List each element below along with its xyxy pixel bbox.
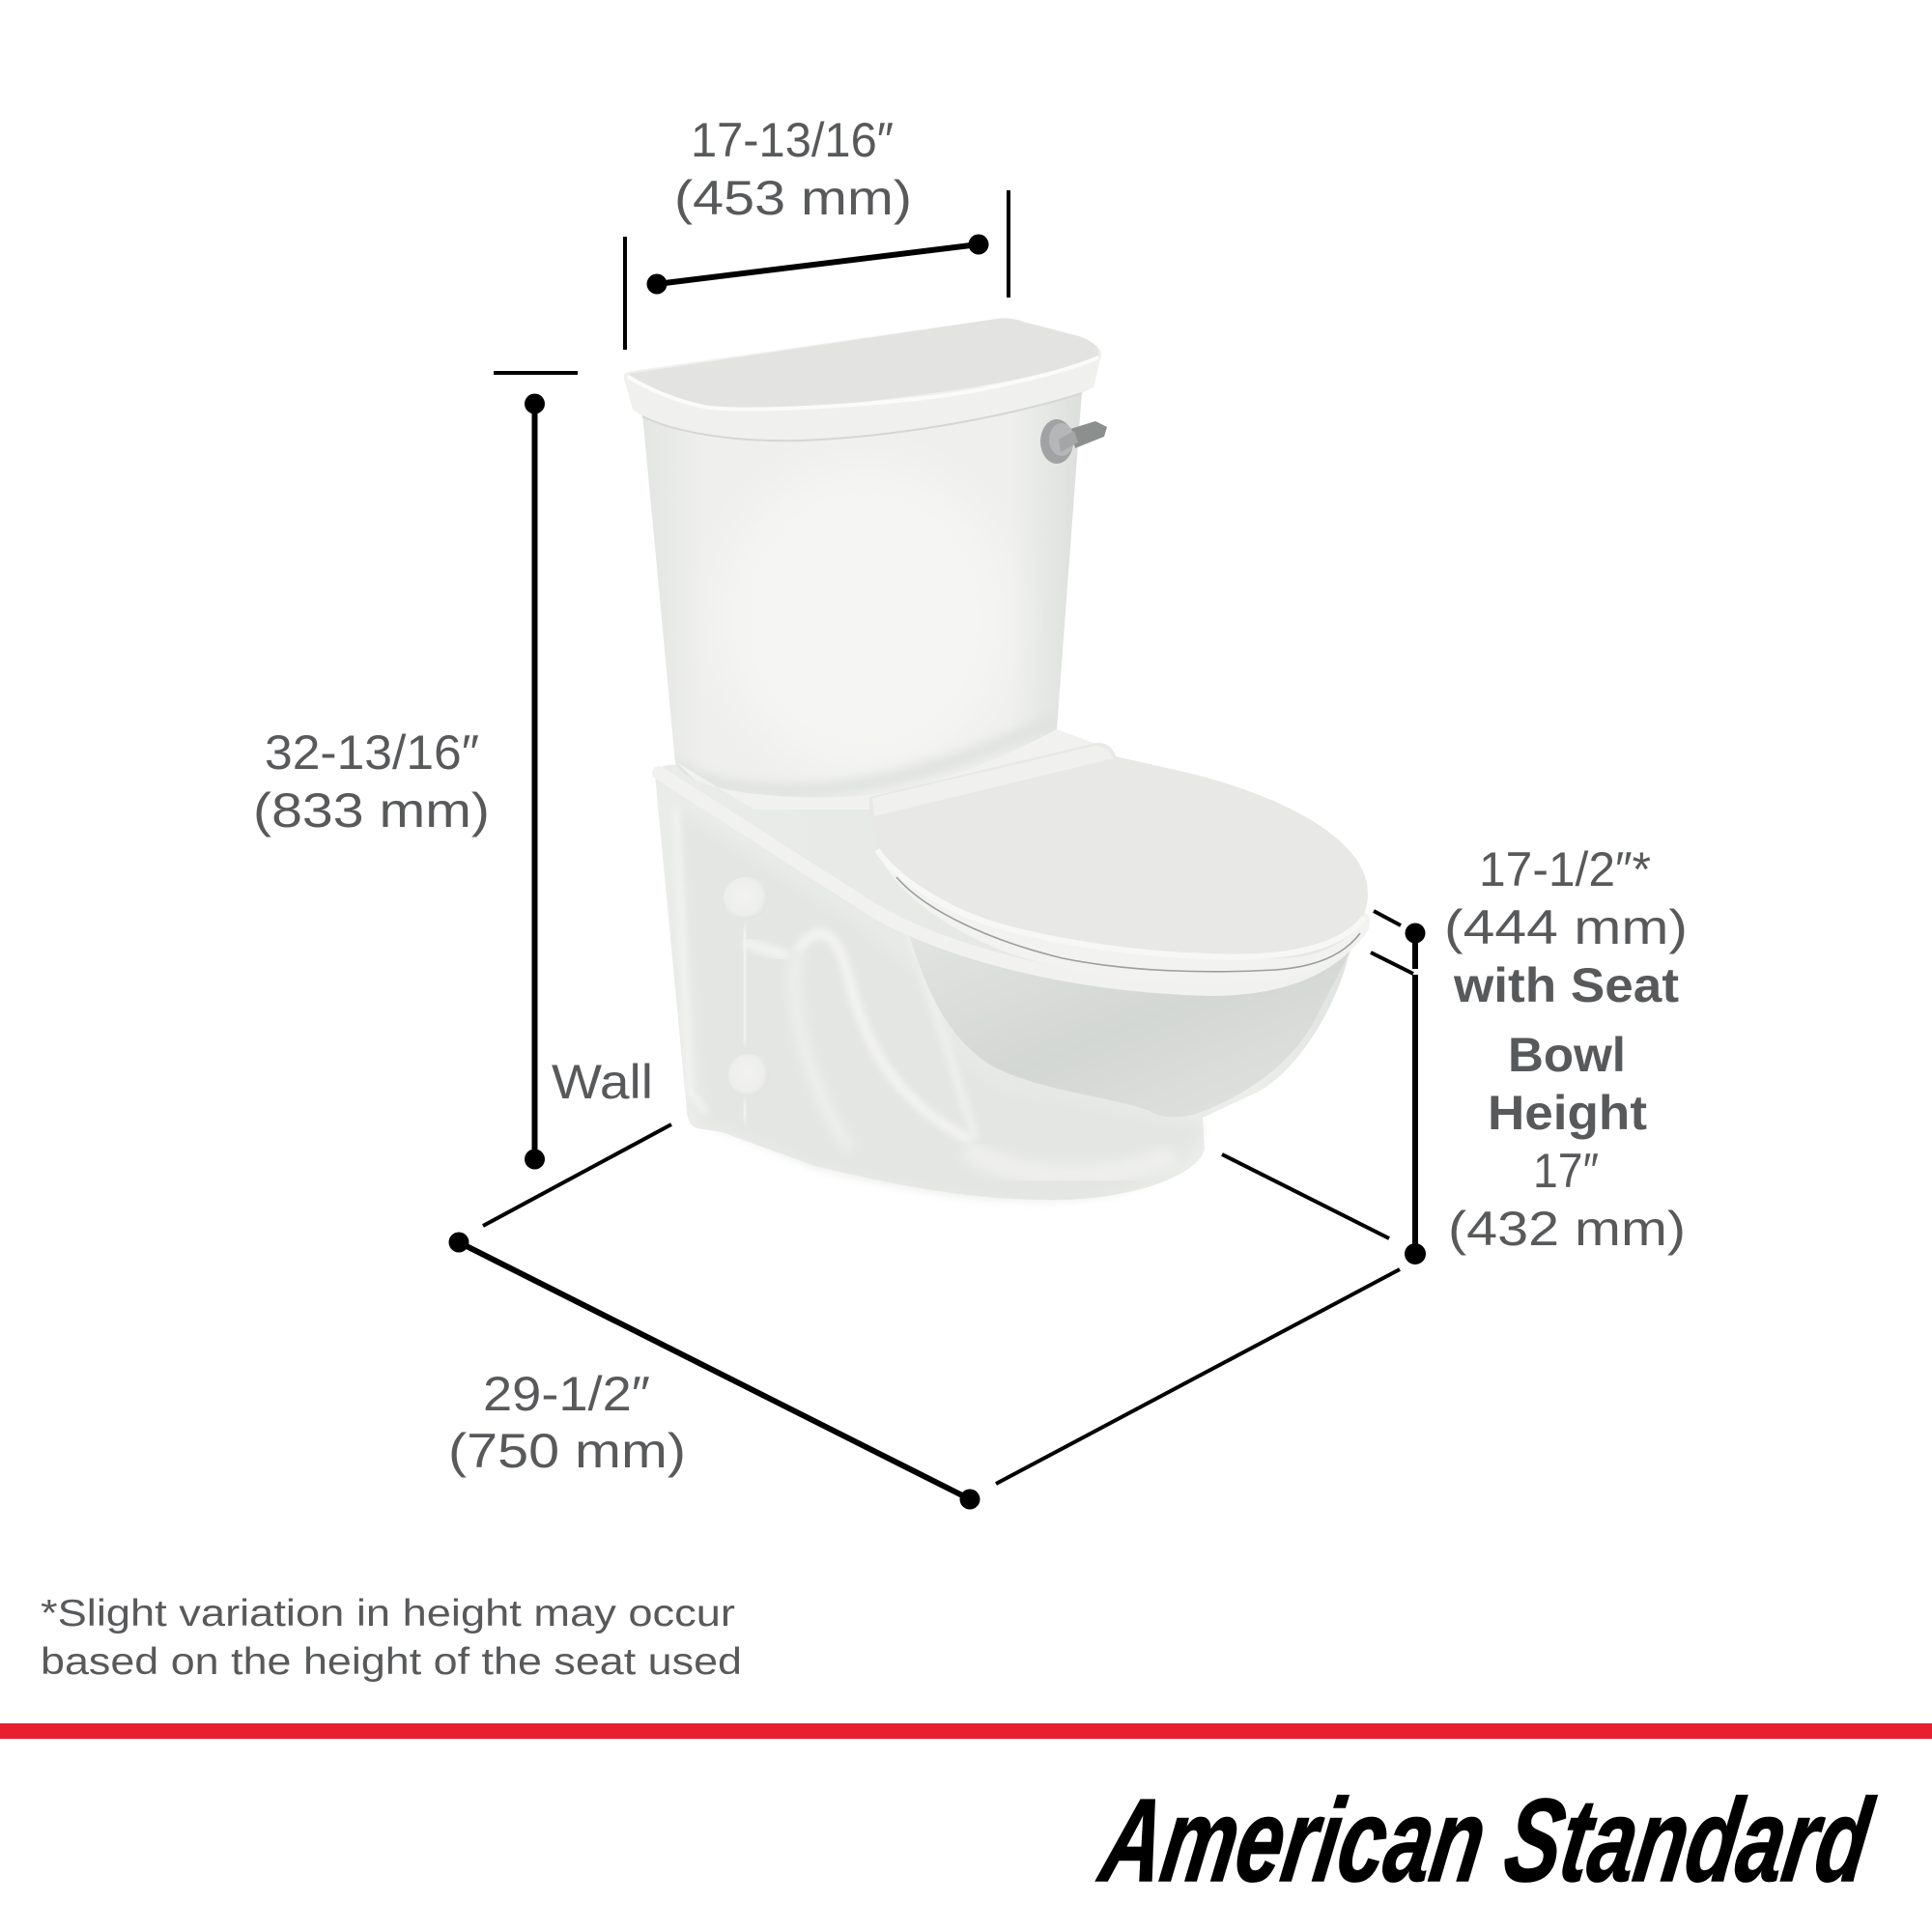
width label: 17-13/16″	[691, 113, 894, 167]
red divider bar	[0, 1723, 1932, 1739]
wall label: Wall	[552, 1055, 653, 1109]
tank shoulder on base	[675, 729, 1096, 810]
toilet illustration	[624, 318, 1370, 1200]
bowl	[909, 932, 1357, 1117]
width marker left	[647, 274, 667, 294]
dimension: bowl height	[1222, 842, 1688, 1264]
bowl metric: (432 mm)	[1448, 1202, 1686, 1256]
height label: 32-13/16″	[265, 725, 479, 780]
footnote line 2: based on the height of the seat used	[41, 1641, 742, 1683]
height label: Height	[1488, 1086, 1647, 1140]
with-seat metric: (444 mm)	[1444, 900, 1688, 954]
depth label: 29-1/2″	[483, 1367, 650, 1421]
bolt cap upper	[724, 877, 768, 920]
with-seat height: 17-1/2″*	[1479, 842, 1651, 896]
with seat label: with Seat	[1453, 958, 1679, 1012]
width metric label: (453 mm)	[674, 171, 912, 225]
tank	[642, 391, 1082, 797]
height metric label: (833 mm)	[253, 783, 490, 838]
dimension: overall height	[253, 373, 578, 1169]
height marker bottom	[525, 1150, 545, 1169]
width marker right	[968, 234, 989, 255]
flush handle	[1040, 419, 1107, 464]
height marker top	[525, 394, 545, 413]
tank lid	[624, 318, 1101, 441]
bowl marker top	[1405, 923, 1426, 943]
bowl height: 17″	[1533, 1144, 1599, 1198]
bowl label: Bowl	[1508, 1028, 1626, 1082]
toilet base and wall plate	[655, 744, 1357, 1200]
depth marker left	[448, 1233, 469, 1252]
depth marker right	[960, 1490, 980, 1509]
seat ring	[877, 850, 1370, 983]
footnote line 1: *Slight variation in height may occur	[41, 1593, 735, 1634]
plate diagonal rim	[659, 773, 1354, 989]
dimension: depth	[448, 1124, 1400, 1509]
bowl marker bottom	[1405, 1243, 1426, 1264]
dimension: tank width	[625, 113, 1009, 350]
seat lid	[869, 743, 1368, 972]
bolt cap lower	[728, 1054, 769, 1096]
depth metric label: (750 mm)	[448, 1424, 686, 1478]
footnote	[41, 1593, 742, 1683]
